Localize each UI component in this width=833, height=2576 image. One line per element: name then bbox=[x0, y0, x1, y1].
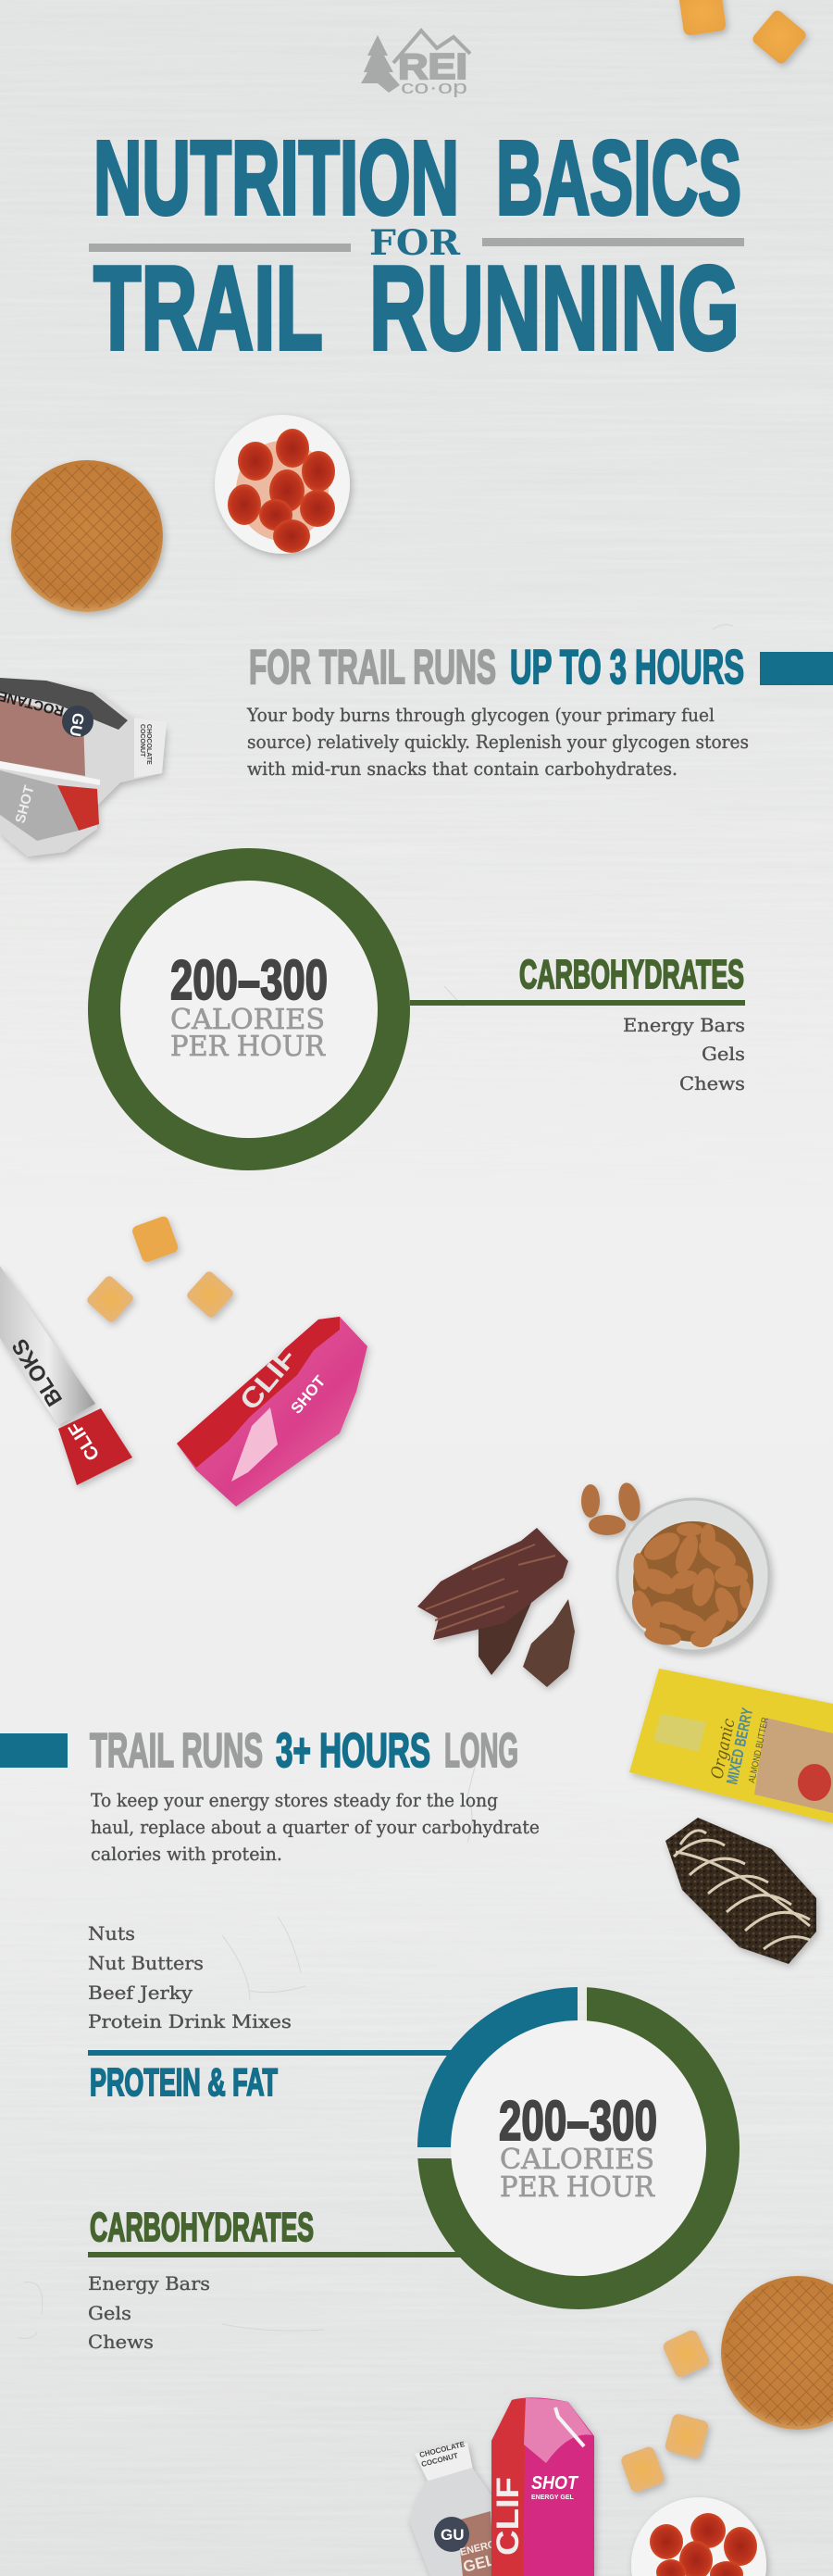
photo: Clif Bloks tube: CLIF bbox=[65, 1419, 104, 1464]
photo: GU packet bottom: GEL bbox=[461, 2551, 497, 2576]
photo: torn GU gel packets: COCONUT bbox=[139, 724, 145, 757]
photo: Clif Shot packet bottom: ENERGY GEL bbox=[531, 2495, 574, 2501]
list items: Energy Bars bbox=[88, 2273, 210, 2295]
photo: bowl of red gummies bottom bbox=[631, 2497, 766, 2576]
photo: Clif Shot gel packet, tilted: SHOT bbox=[288, 1372, 329, 1418]
text block: intro two: calories with protein. bbox=[91, 1844, 282, 1865]
title line: Trail Running: TRAIL bbox=[93, 242, 323, 375]
rule: title right bbox=[482, 238, 744, 246]
calories label: CALORIES bbox=[500, 2144, 654, 2176]
list: protein foods: Protein Drink Mixes bbox=[88, 2011, 292, 2032]
icon: mountains bbox=[393, 31, 470, 63]
heading grey tail: LONG bbox=[444, 1724, 518, 1778]
word: for: FOR bbox=[369, 222, 460, 263]
section heading: 3+ hours bbox=[0, 1724, 518, 1778]
photo: beef jerky bbox=[417, 1528, 575, 1687]
logo wordmark co-op: co·op bbox=[401, 78, 467, 98]
calories number: 200–300 bbox=[499, 2090, 657, 2152]
photo: chocolate drizzled bar bbox=[665, 1818, 816, 1964]
heading grey part: FOR TRAIL RUNS bbox=[249, 641, 496, 694]
photo: stroopwafel bbox=[11, 460, 163, 612]
photo: GU packet bottom: GU bbox=[441, 2526, 465, 2544]
photo: two orange chews, top right bbox=[678, 0, 808, 66]
callout: carbohydrates list left: Chews bbox=[88, 2332, 154, 2353]
text block: intro one: Your body burns through glycogen (your primary fuel bbox=[246, 705, 715, 726]
chart: calories ring, carbohydrates only bbox=[104, 865, 394, 1154]
heading blue part: 3+ HOURS bbox=[276, 1724, 430, 1778]
photo: torn GU gel packets: GU bbox=[66, 711, 87, 738]
list items: Energy Bars bbox=[623, 1015, 745, 1036]
callout: protein and fat bbox=[88, 2050, 454, 2104]
photo: Clif Shot packet bottom: CLIF bbox=[491, 2477, 526, 2556]
photo: Clif Bloks tube: BLOKS bbox=[7, 1334, 68, 1410]
callout heading: CARBOHYDRATES bbox=[90, 2205, 314, 2250]
title bbox=[89, 119, 744, 375]
title line: Nutrition Basics: NUTRITION bbox=[93, 119, 459, 236]
photo: yellow almond butter packet: ALMOND BUTTER bbox=[747, 1717, 771, 1784]
photo: loose almonds bbox=[581, 1481, 643, 1535]
photo: glass bowl of almonds bbox=[617, 1499, 769, 1651]
photo: three chews bottom bbox=[619, 2328, 711, 2494]
list: protein foods: Nuts bbox=[88, 1923, 135, 1945]
photo: torn GU gel packets: SHOT bbox=[12, 783, 38, 825]
section bar bbox=[0, 1733, 68, 1768]
segment: carbohydrates bbox=[434, 2004, 723, 2293]
per hour label: PER HOUR bbox=[170, 1031, 326, 1063]
callout heading: PROTEIN & FAT bbox=[90, 2060, 278, 2104]
callout: carbohydrates list right: Gels bbox=[702, 1044, 745, 1065]
title line: Trail Running bbox=[93, 242, 740, 375]
photo: torn GU gel packets bbox=[0, 678, 167, 857]
rule: title left bbox=[89, 244, 351, 252]
callout: carbohydrates list left bbox=[88, 2205, 461, 2353]
photo: bowl of red gummies bbox=[215, 415, 350, 554]
photo: yellow almond butter packet bbox=[629, 1669, 833, 1823]
connector line bbox=[410, 1000, 745, 1006]
list: protein foods: Beef Jerky bbox=[88, 1982, 193, 2004]
photo: yellow almond butter packet: MIXED BERRY bbox=[723, 1706, 756, 1786]
photo: Clif Shot packet bottom: SHOT bbox=[531, 2473, 579, 2494]
photo: stroopwafel bottom bbox=[721, 2276, 833, 2430]
calories number: 200–300 bbox=[170, 949, 328, 1011]
section bar bbox=[760, 652, 833, 685]
connector line bbox=[88, 2252, 461, 2257]
list: protein foods: Nut Butters bbox=[88, 1953, 204, 1974]
calories label: CALORIES bbox=[170, 1004, 325, 1036]
logo: REI co-op bbox=[361, 31, 470, 98]
text block: intro two: haul, replace about a quarter of your carbohydrate bbox=[91, 1817, 540, 1838]
photo: Clif Bloks tube bbox=[0, 1266, 132, 1485]
photo: GU packet bottom: ENERGY bbox=[459, 2537, 504, 2558]
logo wordmark REI: REI bbox=[398, 47, 467, 87]
photo: torn GU gel packets: CHOCOLATE bbox=[145, 724, 152, 765]
text block: intro two bbox=[91, 1790, 540, 1865]
photo: GU packet bottom bbox=[409, 2440, 504, 2576]
photo: Clif Shot packet bottom bbox=[491, 2397, 594, 2576]
per hour label: PER HOUR bbox=[500, 2171, 655, 2204]
photo: GU packet bottom: COCONUT bbox=[420, 2451, 459, 2469]
text block: intro one: with mid-run snacks that contain carbohydrates. bbox=[247, 758, 678, 780]
segment: protein and fat bbox=[417, 1987, 578, 2147]
photo: Clif Shot gel packet, tilted: CLIF bbox=[234, 1343, 303, 1416]
callout: carbohydrates list right bbox=[410, 952, 745, 1094]
list: protein foods bbox=[88, 1923, 292, 2032]
callout: carbohydrates list left: Gels bbox=[88, 2303, 131, 2324]
text block: intro one: source) relatively quickly. Replenish your glycogen stores bbox=[247, 732, 749, 753]
chart: split calories ring bbox=[434, 2004, 723, 2293]
text block: intro two: To keep your energy stores steady for the long bbox=[91, 1790, 498, 1811]
heading grey part: TRAIL RUNS bbox=[90, 1724, 263, 1778]
photo: Clif Shot gel packet, tilted bbox=[177, 1317, 367, 1507]
photo: yellow almond butter packet: Organic bbox=[707, 1717, 740, 1781]
connector line bbox=[88, 2050, 454, 2056]
photo: three orange chews bbox=[85, 1215, 235, 1324]
photo: GU packet bottom: CHOCOLATE bbox=[418, 2440, 466, 2459]
text block: intro one bbox=[246, 705, 749, 780]
callout: carbohydrates list right: Chews bbox=[679, 1073, 745, 1094]
icon: pine tree bbox=[361, 35, 400, 93]
section heading: up to 3 hours bbox=[249, 641, 833, 694]
